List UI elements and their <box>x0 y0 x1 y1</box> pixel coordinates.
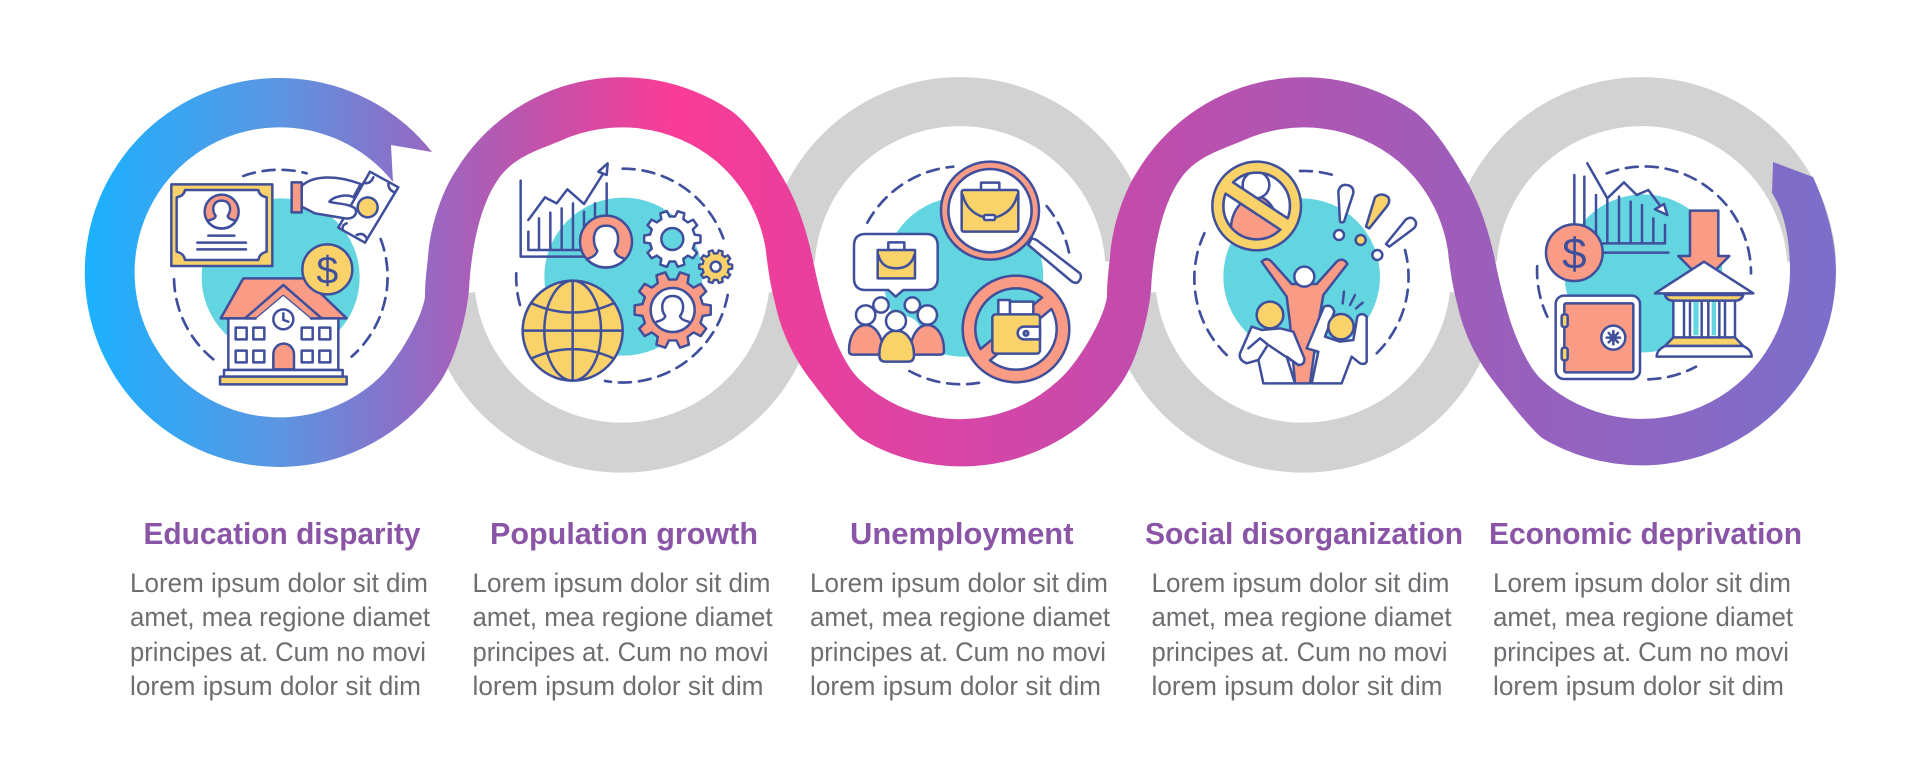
body text <box>472 568 773 701</box>
house <box>220 278 347 384</box>
coin: $ <box>1562 229 1587 278</box>
column 3: unemployment <box>810 516 1110 701</box>
icon: unemployment <box>849 162 1081 384</box>
group of people <box>849 297 944 362</box>
salmon gear with person <box>635 272 711 348</box>
chart with rising trend <box>521 163 608 257</box>
gradient ribbon connecting all circles, with arrow head at start and pointed tail at end <box>85 77 1836 467</box>
dashed circle <box>1537 166 1751 379</box>
body text <box>1493 568 1793 701</box>
crossed person sign <box>1212 162 1301 250</box>
heading: Social disorganization <box>1145 516 1463 551</box>
body text <box>810 568 1110 701</box>
body text <box>1152 568 1452 701</box>
dashed circle <box>867 167 1069 384</box>
certificate <box>171 184 272 266</box>
body text: lorem ipsum dolor sit dim <box>472 671 764 701</box>
heading: Population growth <box>490 516 758 551</box>
icon: social disorganization <box>1194 162 1416 383</box>
body text: principes at. Cum no movi <box>130 637 426 667</box>
icon: economic deprivation <box>1537 163 1753 379</box>
heading: Economic deprivation <box>1489 516 1802 551</box>
body text: lorem ipsum dolor sit dim <box>810 671 1101 701</box>
body text: principes at. Cum no movi <box>1493 637 1789 667</box>
body text: principes at. Cum no movi <box>810 637 1106 667</box>
body text: principes at. Cum no movi <box>472 637 768 667</box>
body text: lorem ipsum dolor sit dim <box>1152 671 1442 701</box>
no wallet sign <box>963 276 1069 382</box>
body text: Lorem ipsum dolor sit dim <box>1493 568 1791 598</box>
person with hands on head <box>1307 292 1367 383</box>
coin: $ <box>316 248 338 292</box>
body text: Lorem ipsum dolor sit dim <box>472 568 770 598</box>
grey background rings <box>450 102 1812 448</box>
icon: population growth <box>516 163 732 382</box>
person with arms raised <box>1262 259 1347 383</box>
body text: Lorem ipsum dolor sit dim <box>1152 568 1450 598</box>
speech bubble with briefcase <box>854 234 938 297</box>
falling chart <box>1574 163 1668 253</box>
body text: Lorem ipsum dolor sit dim <box>810 568 1108 598</box>
dashed circle <box>516 169 728 382</box>
hand with money <box>292 172 398 243</box>
body text: amet, mea regione diamet <box>130 602 430 632</box>
column 5: economic deprivation <box>1489 516 1802 701</box>
down arrow <box>1678 211 1729 282</box>
dashed circle <box>1194 171 1409 355</box>
column 2: population growth <box>472 516 773 701</box>
body text: principes at. Cum no movi <box>1152 637 1448 667</box>
heading: Education disparity <box>144 516 421 551</box>
body text: amet, mea regione diamet <box>472 602 773 632</box>
heading: Unemployment <box>850 516 1074 551</box>
coin <box>1546 224 1603 281</box>
bank <box>1655 262 1753 357</box>
dashed circle <box>174 170 388 359</box>
body text: lorem ipsum dolor sit dim <box>1493 671 1784 701</box>
icon: education disparity <box>171 170 398 384</box>
column 4: social disorganization <box>1145 516 1463 701</box>
body text <box>130 568 430 701</box>
coin <box>302 244 352 294</box>
body text: amet, mea regione diamet <box>1493 602 1793 632</box>
person with crossed arms <box>1240 302 1304 383</box>
body text: amet, mea regione diamet <box>810 602 1110 632</box>
magnifier with briefcase <box>941 162 1081 283</box>
body text: Lorem ipsum dolor sit dim <box>130 568 428 598</box>
person badge <box>580 216 632 268</box>
exclamation marks <box>1334 185 1416 260</box>
body text: lorem ipsum dolor sit dim <box>130 671 421 701</box>
column 1: education disparity <box>130 516 430 701</box>
small yellow gear <box>699 250 732 283</box>
body text: amet, mea regione diamet <box>1152 602 1452 632</box>
safe <box>1556 296 1640 379</box>
white gear <box>644 211 700 267</box>
globe <box>523 281 623 381</box>
